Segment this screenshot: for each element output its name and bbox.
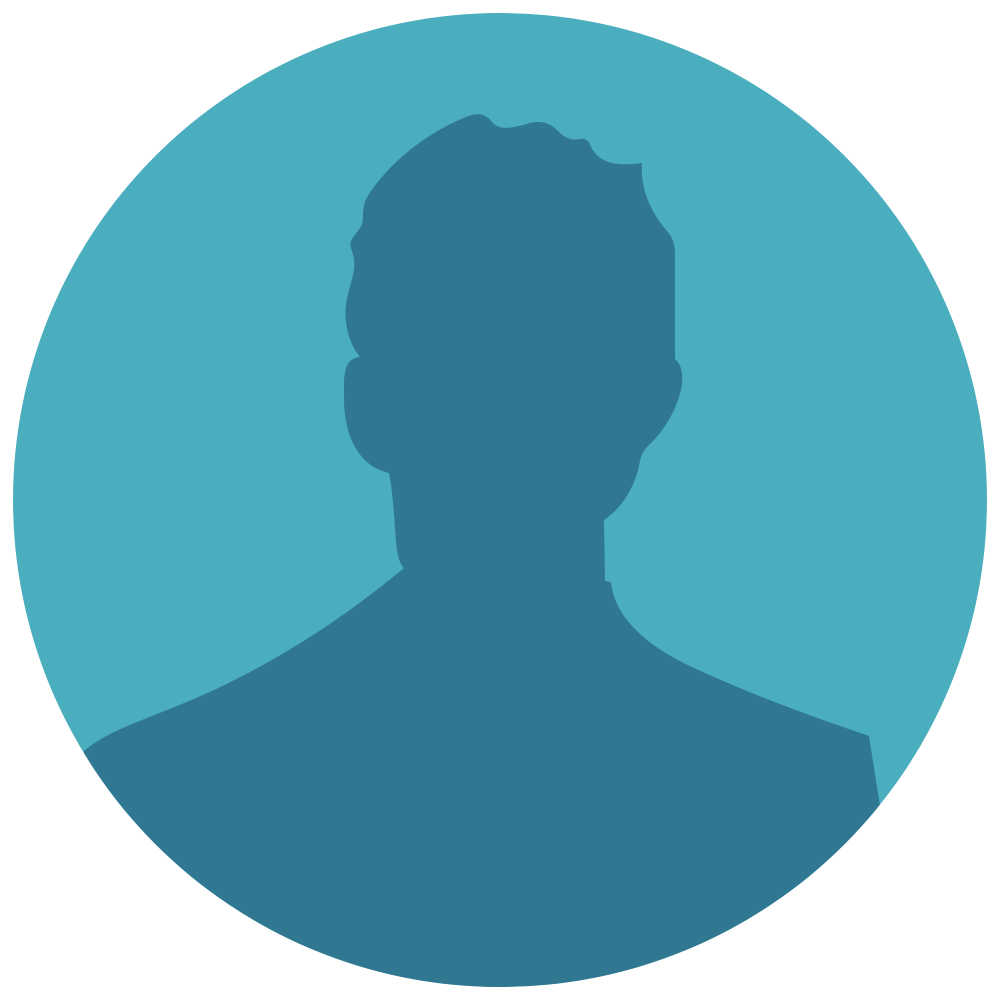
person silhouette [84, 114, 880, 1000]
